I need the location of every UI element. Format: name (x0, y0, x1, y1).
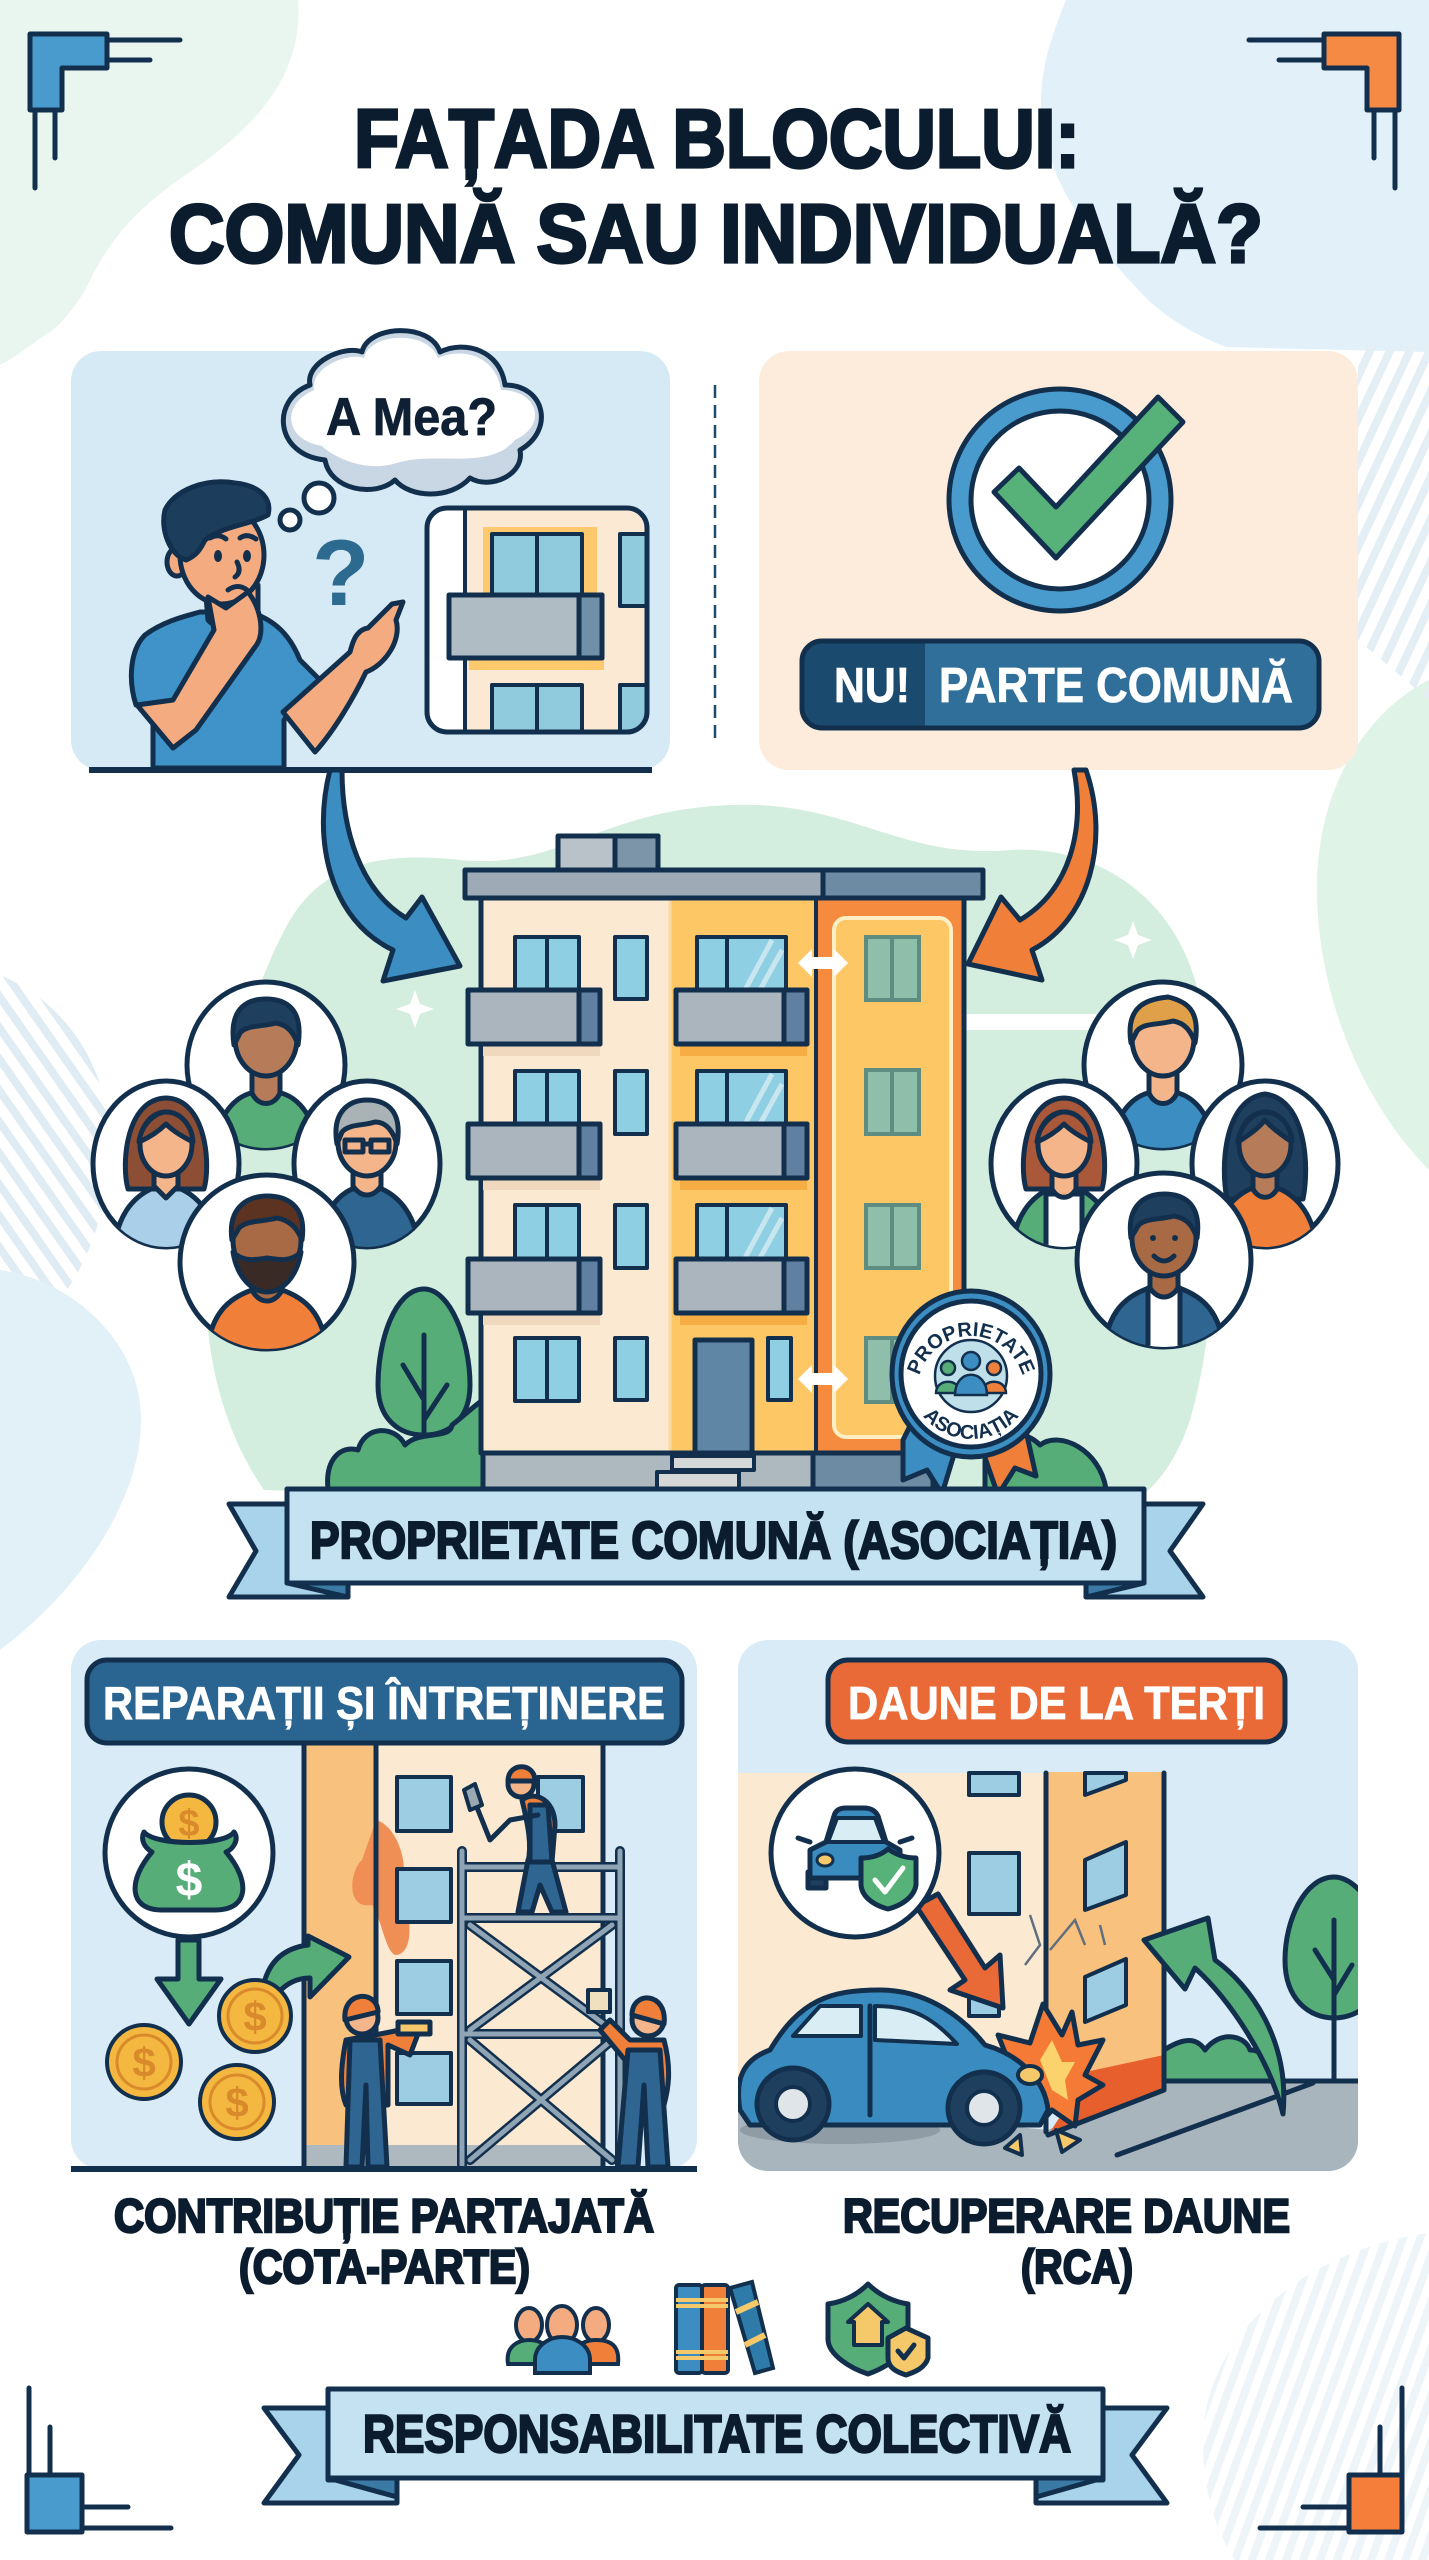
label pill (802, 641, 1319, 728)
icon: coins: $ (243, 1993, 267, 2040)
arrow: green down (157, 1940, 221, 2024)
banner: Proprietate comună (229, 1489, 1203, 1597)
thinking man (131, 482, 403, 768)
banner: Responsabilitate colectivă (264, 2389, 1167, 2503)
label pill: PARTE COMUNĂ (939, 659, 1293, 713)
corner bracket: bottom right (1260, 2388, 1402, 2532)
medal: Proprietate Asociația: ASOCIAȚIA (923, 1410, 1019, 1439)
walls (481, 898, 670, 1453)
header pill: REPARAȚII ȘI ÎNTREȚINERE (103, 1677, 665, 1730)
building (465, 836, 983, 1489)
windows shared facade (866, 937, 919, 1402)
arrow: green recovery (1144, 1918, 1284, 2114)
balcony close-up (427, 508, 660, 745)
icon: money bag (105, 1769, 273, 1937)
medal people (936, 1352, 1006, 1395)
scaffolding (462, 1851, 620, 2165)
worker with brush (588, 1990, 669, 2167)
resident: woman with dark hair (1192, 1081, 1338, 1259)
blue car (739, 1990, 1048, 2144)
title: FAȚADA BLOCULUI: (354, 92, 1080, 186)
door (695, 1340, 752, 1453)
arrow: green curved to wall (264, 1936, 349, 1997)
medal: Proprietate Asociația: PROPRIETATE (906, 1322, 1036, 1375)
damaged building (738, 1773, 1046, 2125)
corner bracket: top right (1249, 34, 1399, 188)
question mark: ? (312, 520, 369, 625)
icon: people (508, 2306, 618, 2373)
resident: bearded man in orange (180, 1175, 354, 1362)
worker on scaffold (464, 1767, 566, 1912)
balcony shadows (483, 1044, 807, 1325)
resident: blond man (1084, 982, 1242, 1160)
car shadow (740, 2125, 940, 2144)
glass reflections (745, 940, 782, 1258)
bush right of building (985, 1436, 1106, 1489)
header pill: DAUNE DE LA TERȚI (848, 1677, 1265, 1730)
roof (465, 870, 823, 898)
bush (1164, 2037, 1272, 2081)
header pill (828, 1660, 1285, 1742)
title: COMUNĂ SAU INDIVIDUALĂ? (169, 187, 1263, 280)
arrow: orange, from answer to building (968, 770, 1096, 980)
tree (1282, 1874, 1358, 2020)
arrow: orange impact (916, 1894, 1003, 2008)
icon: coins: $ (225, 2079, 249, 2126)
thought cloud: A Mea? (326, 388, 497, 447)
caption: shared contribution: (COTA-PARTE) (239, 2240, 530, 2293)
icon: insured car (771, 1769, 939, 1937)
resident: green shirt (187, 982, 345, 1160)
caption: shared contribution (114, 2189, 654, 2293)
banner: Proprietate comună: PROPRIETATE COMUNĂ (ASOCIAȚIA) (310, 1512, 1117, 1570)
icon: coins (107, 1980, 291, 2139)
resident: smiling man in blazer (1077, 1173, 1251, 1360)
header pill (87, 1660, 682, 1743)
panel: answer "NU! Parte comună" (759, 351, 1358, 770)
icon: check mark in circle (949, 389, 1183, 611)
banner: Responsabilitate colectivă: RESPONSABILITATE COLECTIVĂ (363, 2404, 1071, 2464)
caption: damage recovery: (RCA) (1021, 2240, 1133, 2293)
panel: repairs and maintenance (71, 1640, 697, 2169)
sparkles and white bar (396, 921, 1152, 1030)
resident: woman in green jacket (991, 1081, 1137, 1259)
facade under repair (304, 1744, 603, 2169)
corner bracket: top left (30, 34, 180, 188)
icon: money bag: $ (176, 1854, 203, 1907)
panel: third-party damage (738, 1640, 1385, 2171)
debris (1005, 2130, 1080, 2155)
caption: shared contribution: CONTRIBUȚIE PARTAJATĂ (114, 2189, 654, 2243)
resident: older man with glasses (294, 1081, 440, 1259)
resident: woman with brown hair (93, 1081, 239, 1259)
chimney (558, 836, 658, 870)
corner bracket: bottom left (27, 2388, 171, 2532)
wall cracks (1025, 1915, 1105, 1965)
base and steps (483, 1453, 813, 1489)
caption: damage recovery: RECUPERARE DAUNE (843, 2189, 1290, 2242)
white boundary arrows (798, 949, 848, 1393)
title (169, 92, 1263, 280)
windows left column (515, 937, 791, 1401)
residents group right (991, 982, 1338, 1360)
arrow: blue, from question to building (323, 770, 460, 981)
thought cloud (280, 331, 541, 530)
medal: Proprietate Asociația (890, 1288, 1052, 1486)
dashed divider (714, 385, 716, 743)
impact burst (998, 2004, 1103, 2126)
label pill: NU! (834, 659, 910, 713)
icon: books (676, 2282, 773, 2373)
balconies (468, 990, 807, 1313)
icon: house shield (828, 2284, 928, 2375)
tree left of building (328, 1289, 483, 1489)
icon: coins: $ (132, 2039, 156, 2086)
residents group left (93, 982, 440, 1362)
icon: money bag: $ (178, 1803, 200, 1845)
caption: damage recovery (843, 2189, 1290, 2293)
worker with roller (342, 1996, 430, 2167)
panel: question "A Mea?" (71, 331, 670, 770)
